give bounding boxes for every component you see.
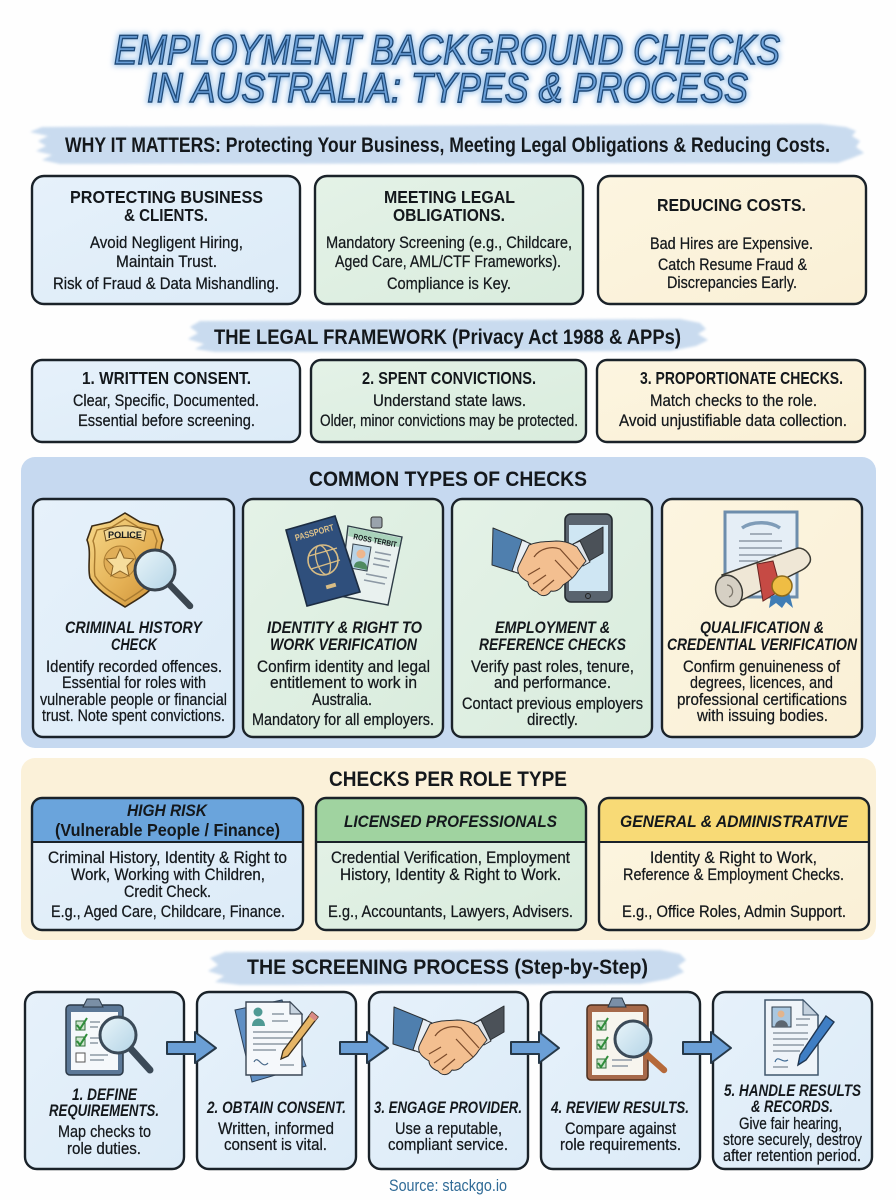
banner: legal framework: THE LEGAL FRAMEWORK (Privacy Act 1988 & APPs)	[214, 326, 681, 349]
card: high risk	[32, 798, 303, 930]
panel: reducing costs: Bad Hires are Expensive.	[650, 235, 813, 253]
icon: passport and id card: PASSPORT	[294, 522, 335, 543]
title: IN AUSTRALIA: TYPES & PROCESS	[147, 64, 748, 111]
banner: why it matters	[30, 124, 864, 164]
card: high risk: Credit Check.	[124, 883, 211, 901]
arrow: step 4 to 5	[683, 1032, 731, 1063]
text: qualification description: professional certifications	[677, 691, 847, 709]
heading: identity: WORK VERIFICATION	[270, 636, 418, 654]
text: step 3: Use a reputable,	[395, 1120, 502, 1138]
text: employment description: Verify past roles, tenure,	[471, 658, 634, 676]
heading: common types: COMMON TYPES OF CHECKS	[309, 468, 587, 491]
text: step 5: & RECORDS.	[751, 1098, 833, 1116]
text: step 4: role requirements.	[560, 1136, 681, 1154]
panel: written consent: Clear, Specific, Documented.	[73, 392, 259, 410]
step 3: engage provider	[369, 992, 528, 1169]
icon: certificate and scroll	[711, 512, 810, 610]
panel: proportionate checks: Avoid unjustifiable data collection.	[619, 412, 847, 430]
text: qualification description	[677, 658, 847, 725]
arrow: step 3 to 4	[511, 1032, 559, 1063]
heading: employment: REFERENCE CHECKS	[479, 636, 626, 654]
banner: screening process: THE SCREENING PROCESS (Step-by-Step)	[247, 956, 648, 979]
icon: passport and id card	[286, 516, 402, 606]
source credit: Source: stackgo.io	[389, 1176, 507, 1195]
text: employment description: directly.	[527, 711, 578, 729]
panel: protecting business and clients: Risk of Fraud & Data Mishandling.	[53, 275, 279, 293]
panel: reducing costs: REDUCING COSTS.	[657, 195, 806, 215]
text: step 4: 4. REVIEW RESULTS.	[550, 1099, 689, 1117]
text: step 5: 5. HANDLE RESULTS	[724, 1082, 861, 1100]
heading: employment	[479, 619, 626, 654]
card: general and administrative: Reference & Employment Checks.	[623, 866, 844, 884]
panel: protecting business and clients: Maintain Trust.	[116, 253, 217, 271]
text: criminal history description	[40, 658, 227, 725]
heading: identity: IDENTITY & RIGHT TO	[267, 619, 422, 637]
panel: spent convictions: 2. SPENT CONVICTIONS.	[362, 368, 536, 388]
text: criminal history description: Essential for roles with	[62, 674, 206, 692]
card: licensed professionals: LICENSED PROFESSIONALS	[344, 813, 557, 831]
panel: protecting business and clients	[32, 176, 300, 304]
icon: police badge with magnifier	[87, 513, 190, 607]
card: licensed professionals	[316, 798, 586, 930]
text: step 5	[723, 1082, 863, 1165]
panel: proportionate checks	[597, 360, 865, 442]
panel: protecting business and clients: & CLIENTS.	[124, 205, 208, 225]
card: general and administrative: E.g., Office Roles, Admin Support.	[622, 903, 846, 921]
card: licensed professionals: Credential Verification, Employment	[331, 849, 570, 867]
text: step 5: after retention period.	[723, 1147, 861, 1165]
heading: qualification: CREDENTIAL VERIFICATION	[667, 636, 858, 654]
heading: criminal history: CRIMINAL HISTORY	[65, 619, 204, 637]
text: step 4: Compare against	[565, 1120, 676, 1138]
card: high risk: Work, Working with Children,	[71, 866, 265, 884]
text: identity description: Confirm identity and legal	[257, 658, 430, 676]
panel: reducing costs	[598, 176, 866, 304]
card: licensed professionals: History, Identity & Right to Work.	[340, 866, 561, 884]
banner: screening process	[208, 950, 686, 985]
panel: meeting legal obligations: Aged Care, AML/CTF Frameworks).	[335, 253, 561, 271]
panel: reducing costs: Discrepancies Early.	[667, 274, 797, 292]
text: step 2: consent is vital.	[224, 1136, 327, 1154]
icon: clipboard with magnifier	[66, 999, 150, 1075]
text: qualification description: with issuing bodies.	[696, 707, 828, 725]
heading: criminal history	[65, 619, 204, 654]
card: high risk: E.g., Aged Care, Childcare, Finance.	[51, 903, 285, 921]
icon: consent document and pencil	[235, 1000, 318, 1082]
text: step 3: compliant service.	[388, 1136, 508, 1154]
text: step 1	[49, 1086, 159, 1158]
step 1: define requirements	[25, 992, 184, 1169]
text: step 5: store securely, destroy	[723, 1131, 863, 1149]
card: high risk: HIGH RISK	[127, 802, 208, 820]
panel: protecting business and clients: Avoid Negligent Hiring,	[90, 234, 243, 252]
panel: protecting business and clients: PROTECTING BUSINESS	[70, 187, 263, 207]
text: identity description	[252, 658, 434, 729]
card: high risk: Criminal History, Identity & Right to	[48, 849, 287, 867]
panel: spent convictions: Understand state laws.	[373, 392, 526, 410]
arrow: step 1 to 2	[167, 1032, 216, 1063]
text: step 1: 1. DEFINE	[72, 1086, 138, 1104]
text: step 1: REQUIREMENTS.	[49, 1102, 159, 1120]
title: IN AUSTRALIA: TYPES & PROCESS	[147, 64, 748, 111]
text: step 1: Map checks to	[58, 1123, 151, 1141]
step 4: review results	[541, 992, 700, 1169]
panel: proportionate checks: 3. PROPORTIONATE CHECKS.	[640, 368, 843, 388]
card: licensed professionals: E.g., Accountants, Lawyers, Advisers.	[328, 903, 573, 921]
icon: handshake	[393, 1006, 504, 1075]
heading: qualification	[667, 619, 858, 654]
card: employment and reference checks	[452, 499, 652, 737]
text: employment description: and performance.	[494, 674, 611, 692]
heading: employment: EMPLOYMENT &	[495, 619, 610, 637]
panel: meeting legal obligations: OBLIGATIONS.	[393, 205, 505, 225]
text: criminal history description: vulnerable people or financial	[40, 691, 227, 709]
title	[114, 26, 780, 111]
card: qualification and credential verification	[662, 499, 862, 737]
title: EMPLOYMENT BACKGROUND CHECKS	[114, 26, 780, 73]
heading: criminal history: CHECK	[111, 636, 158, 654]
panel: meeting legal obligations	[315, 176, 583, 304]
icon: police badge with magnifier: POLICE	[108, 530, 142, 540]
panel: spent convictions: Older, minor convictions may be protected.	[320, 412, 578, 430]
panel: meeting legal obligations: Mandatory Screening (e.g., Childcare,	[326, 234, 572, 252]
panel: written consent: Essential before screening.	[78, 412, 255, 430]
text: identity description: Australia.	[312, 691, 372, 709]
panel: reducing costs: Catch Resume Fraud &	[658, 256, 807, 274]
heading: checks per role: CHECKS PER ROLE TYPE	[329, 768, 567, 791]
heading: identity	[267, 619, 422, 654]
title: EMPLOYMENT BACKGROUND CHECKS	[114, 26, 780, 73]
text: step 2: Written, informed	[218, 1120, 334, 1138]
panel: spent convictions	[311, 360, 586, 442]
section: checks per role type	[21, 758, 876, 940]
text: step 4	[550, 1099, 689, 1154]
text: identity description: entitlement to work in	[270, 674, 417, 692]
text: step 3	[374, 1099, 522, 1154]
panel: meeting legal obligations: MEETING LEGAL	[384, 187, 515, 207]
icon: handshake and phone	[492, 514, 612, 602]
icon: passport and id card: ROSS TERBIT	[353, 532, 398, 549]
card: criminal history check	[33, 499, 234, 737]
text: criminal history description: Identify recorded offences.	[46, 658, 222, 676]
card: general and administrative: Identity & Right to Work,	[650, 849, 817, 867]
text: criminal history description: trust. Note spent convictions.	[42, 707, 225, 725]
text: step 2	[206, 1099, 346, 1154]
banner: legal framework	[188, 319, 708, 352]
card: high risk: (Vulnerable People / Finance)	[55, 820, 280, 840]
arrow: step 2 to 3	[340, 1032, 388, 1063]
text: step 2: 2. OBTAIN CONSENT.	[206, 1099, 346, 1117]
card: identity and right to work	[243, 499, 443, 737]
text: employment description	[462, 658, 643, 729]
text: employment description: Contact previous employers	[462, 695, 643, 713]
panel: meeting legal obligations: Compliance is Key.	[387, 275, 511, 293]
panel: written consent: 1. WRITTEN CONSENT.	[82, 368, 251, 388]
card: general and administrative: GENERAL & ADMINISTRATIVE	[620, 813, 849, 831]
section: common types of checks	[21, 457, 876, 748]
text: step 5: Give fair hearing,	[739, 1115, 842, 1133]
panel: written consent	[32, 360, 300, 442]
text: qualification description: degrees, licences, and	[690, 674, 833, 692]
panel: proportionate checks: Match checks to the role.	[650, 392, 817, 410]
icon: record document and pen	[765, 1000, 834, 1075]
step 5: handle results and records	[713, 992, 872, 1169]
text: step 1: role duties.	[67, 1140, 141, 1158]
icon: clipboard with magnifier	[587, 998, 664, 1080]
heading: qualification: QUALIFICATION &	[700, 619, 824, 637]
step 2: obtain consent	[197, 992, 356, 1169]
card: general and administrative	[599, 798, 869, 930]
text: qualification description: Confirm genuineness of	[683, 658, 840, 676]
text: step 3: 3. ENGAGE PROVIDER.	[374, 1099, 522, 1117]
text: identity description: Mandatory for all employers.	[252, 711, 434, 729]
